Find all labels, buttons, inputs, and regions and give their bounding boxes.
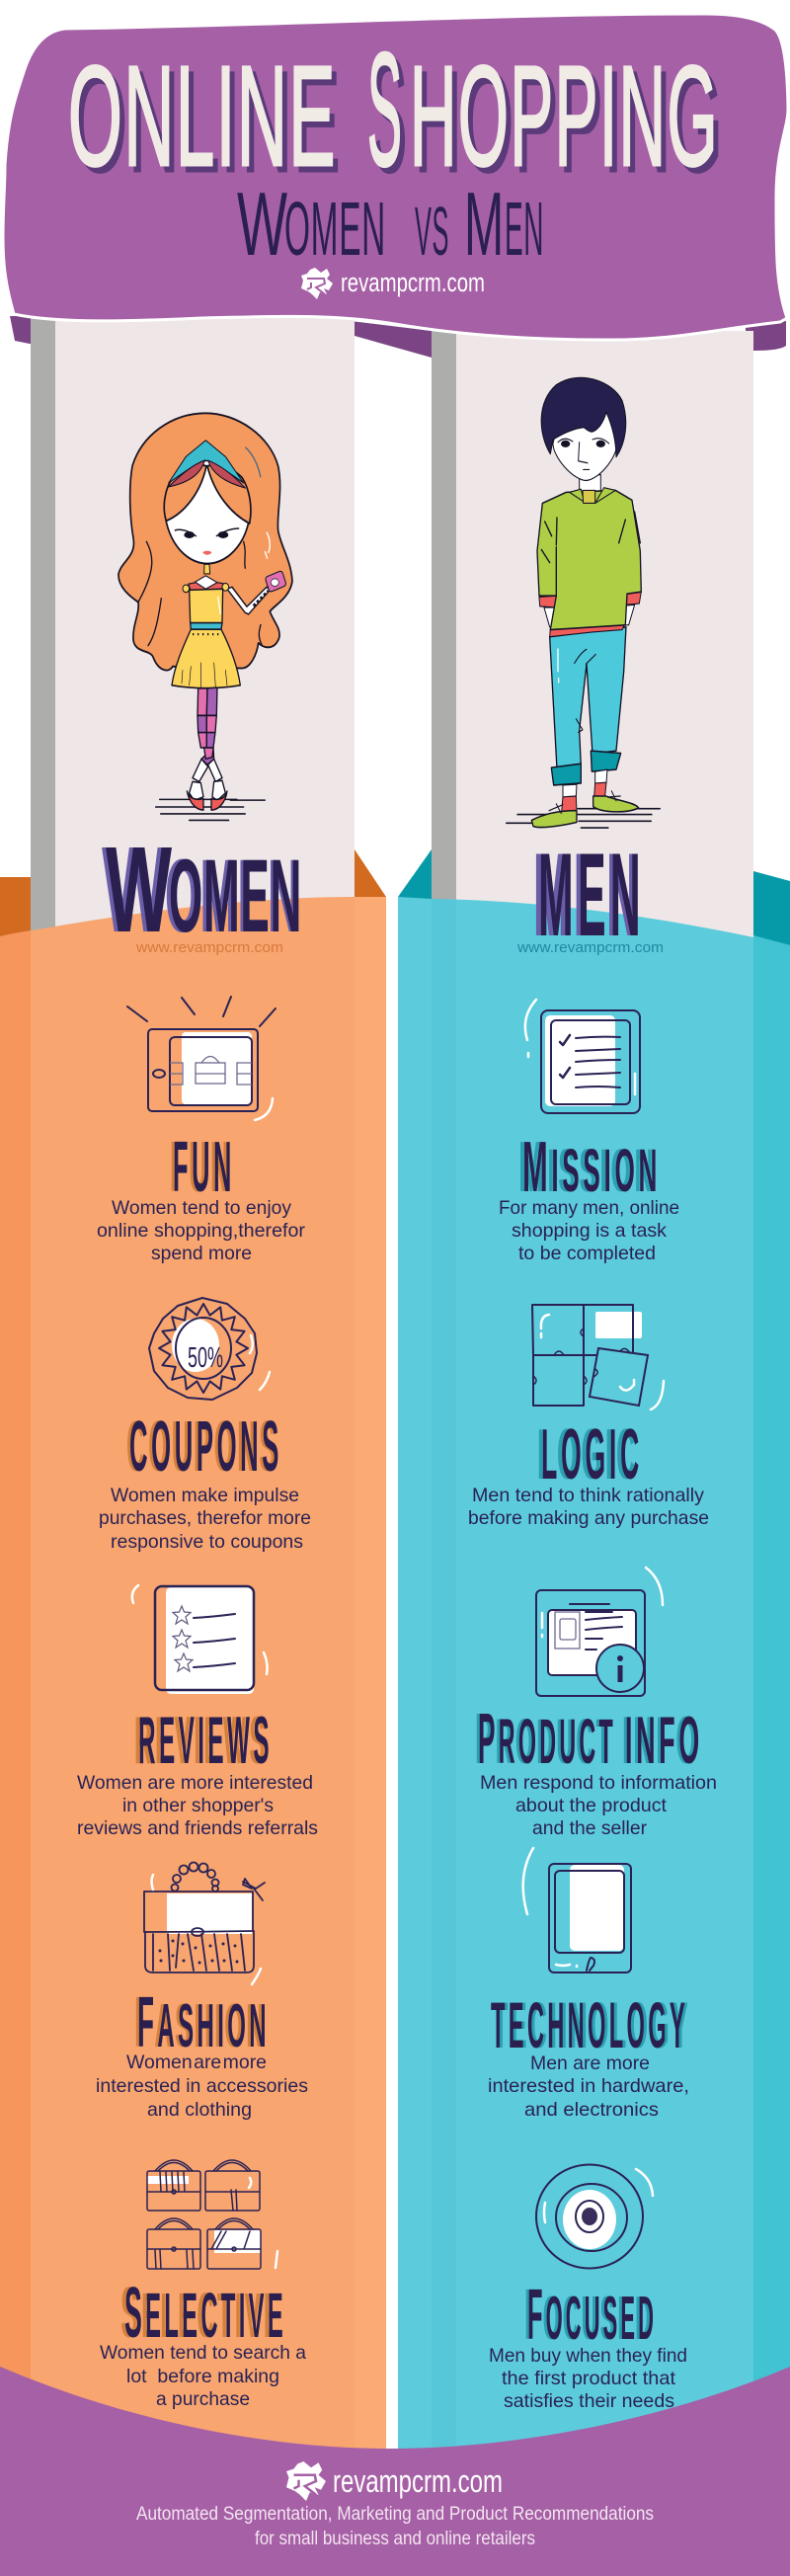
icon: revamp logo footer — [286, 2461, 326, 2501]
trousers — [550, 627, 626, 768]
women heading letters — [106, 823, 302, 958]
headband — [169, 441, 244, 483]
title shadow: ONLINE — [73, 42, 342, 201]
character: woman — [118, 413, 292, 820]
url men: www.revampcrm.com — [516, 939, 664, 956]
character: man — [507, 377, 660, 828]
footer tagline: for small business and online retailers — [255, 2529, 535, 2549]
text coupons — [99, 1485, 311, 1553]
text logic: Men tend to think rationally — [472, 1485, 704, 1506]
icon: handbag — [144, 1863, 265, 1984]
text: REVIEWS — [138, 1703, 273, 1778]
icon: revamp logo top — [301, 268, 333, 299]
text focused: Men buy when they find — [489, 2345, 687, 2367]
heading technology — [491, 1988, 691, 2061]
text product info: and the seller — [532, 1817, 647, 1839]
ground lines — [507, 809, 660, 828]
text mission — [499, 1197, 679, 1264]
text: OMEN — [169, 839, 302, 954]
facial features — [558, 439, 609, 469]
section: fun: FUN — [173, 1128, 235, 1207]
women heading letters: W — [106, 823, 173, 958]
section: fashion: FASHION — [137, 1983, 270, 2062]
hair — [541, 377, 626, 457]
section: fun — [97, 997, 305, 1264]
text product info — [480, 1772, 717, 1839]
trouser details — [558, 649, 595, 733]
banner — [3, 14, 788, 340]
heading fun — [170, 1128, 235, 1207]
text fun: online shopping,therefor — [97, 1220, 305, 1242]
heading: men — [533, 829, 645, 961]
women heading shadow — [102, 823, 300, 958]
icon: product info card — [536, 1568, 663, 1696]
dress — [172, 589, 240, 688]
text fashion: interested in accessories — [96, 2075, 308, 2097]
icon: puzzle — [532, 1305, 664, 1409]
socks — [562, 769, 607, 812]
text reviews: Women are more interested — [77, 1772, 313, 1794]
text selective: lot before making — [126, 2366, 279, 2387]
icon: tablet with bags — [127, 997, 276, 1120]
subtitle: women vs men — [237, 175, 544, 275]
text: COUPONS — [129, 1408, 282, 1487]
text coupons: responsive to coupons — [111, 1531, 303, 1553]
ribbon folds orange — [0, 849, 386, 948]
section: fun: FUN — [170, 1128, 232, 1207]
neck and collar — [183, 564, 229, 593]
text coupons: purchases, therefor more — [99, 1507, 311, 1529]
ground lines — [156, 799, 265, 820]
arm and camera — [227, 570, 286, 614]
hair strands — [138, 541, 262, 646]
text: EN — [505, 187, 544, 272]
section: technology — [488, 1848, 691, 2121]
text fashion: and clothing — [147, 2099, 252, 2121]
text mission: to be completed — [518, 1243, 656, 1264]
text fashion: Women are more — [126, 2052, 267, 2073]
shoes — [531, 791, 639, 828]
face — [553, 406, 617, 481]
title shadow: S — [372, 25, 408, 205]
text fashion — [96, 2052, 308, 2121]
text technology: Men are more — [530, 2053, 650, 2074]
icon: tablet — [523, 1848, 631, 1972]
section: fashion: FASHION — [134, 1983, 267, 2062]
trouser cuffs — [551, 751, 621, 785]
text focused: satisfies their needs — [504, 2390, 674, 2412]
section: product info — [475, 1568, 717, 1839]
text selective: Women tend to search a — [100, 2342, 306, 2364]
text: COUPONS — [126, 1408, 279, 1487]
text mission: For many men, online — [499, 1197, 679, 1219]
title: online shopping — [68, 19, 724, 205]
text: REVIEWS — [134, 1703, 269, 1778]
text selective — [100, 2342, 306, 2410]
face — [165, 460, 250, 564]
text: SELECTIVE — [124, 2274, 286, 2353]
banner shadow — [10, 316, 786, 358]
text mission: shopping is a task — [512, 1220, 667, 1242]
panel: women orange body — [0, 897, 386, 2459]
shoes — [187, 780, 227, 810]
sweater details — [541, 488, 640, 596]
footer purple band — [0, 2367, 790, 2576]
text: OMEN — [165, 839, 300, 954]
subtitle: women vs men: VS — [415, 193, 449, 270]
logo text footer: revampcrm.com — [333, 2463, 503, 2499]
section: reviews — [77, 1585, 318, 1839]
subtitle: women vs men: W — [237, 175, 288, 275]
text coupons: Women make impulse — [111, 1485, 299, 1506]
text reviews — [77, 1772, 318, 1839]
text fun: Women tend to enjoy — [112, 1197, 291, 1219]
icon: coupon badge: 50% — [188, 1342, 223, 1374]
title letters: ONLINE — [68, 37, 337, 196]
footer tagline — [136, 2504, 654, 2549]
title letters: S — [367, 19, 403, 200]
text logic: before making any purchase — [468, 1507, 709, 1529]
footer tagline: Automated Segmentation, Marketing and Product Recommendations — [136, 2504, 654, 2525]
text technology: and electronics — [524, 2099, 659, 2121]
hands — [544, 604, 635, 629]
ribbon folds teal — [398, 849, 790, 953]
legs — [193, 687, 222, 781]
text reviews: reviews and friends referrals — [77, 1817, 318, 1839]
text reviews: in other shopper's — [122, 1795, 274, 1816]
text technology: interested in hardware, — [488, 2075, 689, 2097]
icon: target eye — [536, 2165, 653, 2268]
section: selective — [100, 2160, 306, 2410]
panel: women column — [31, 318, 355, 950]
text product info: Men respond to information — [480, 1772, 717, 1794]
section: coupons — [99, 1298, 311, 1553]
subtitle: women vs men: M — [464, 175, 505, 275]
section: logic — [468, 1305, 709, 1529]
icon: four bags — [147, 2160, 277, 2269]
sweater cuffs and hem — [539, 592, 641, 637]
text: SELECTIVE — [120, 2274, 282, 2353]
text fun: spend more — [151, 1243, 252, 1264]
section: fashion — [96, 1863, 308, 2121]
icon: coupon badge — [149, 1298, 270, 1400]
neck — [580, 475, 600, 492]
url women: www.revampcrm.com — [135, 939, 283, 956]
heading reviews — [134, 1703, 273, 1778]
icon: reviews card — [132, 1585, 268, 1694]
text focused — [489, 2345, 687, 2412]
sweater — [537, 490, 641, 630]
panel: men teal body — [398, 897, 790, 2459]
women heading shadow: W — [102, 823, 169, 958]
subtitle: women vs men: OMEN — [284, 187, 386, 272]
section: focused — [489, 2165, 687, 2412]
text focused: the first product that — [502, 2368, 676, 2389]
text product info: about the product — [515, 1795, 668, 1816]
heading logic — [537, 1415, 643, 1494]
panel: men column — [432, 331, 753, 963]
heading focused — [524, 2276, 657, 2355]
icon: checklist — [525, 1000, 640, 1113]
heading selective — [120, 2274, 286, 2353]
hair — [118, 413, 292, 671]
section: mission — [499, 1000, 679, 1264]
heading mission — [518, 1128, 661, 1207]
eyes and lips — [175, 528, 239, 555]
heading coupons — [126, 1408, 282, 1487]
logo text top: revampcrm.com — [341, 268, 485, 297]
text selective: a purchase — [156, 2388, 250, 2410]
fringe — [164, 465, 206, 521]
text logic — [468, 1485, 709, 1529]
text fun — [97, 1197, 305, 1264]
text technology — [488, 2053, 689, 2121]
heading: women — [102, 823, 302, 958]
heading fashion — [134, 1983, 270, 2062]
